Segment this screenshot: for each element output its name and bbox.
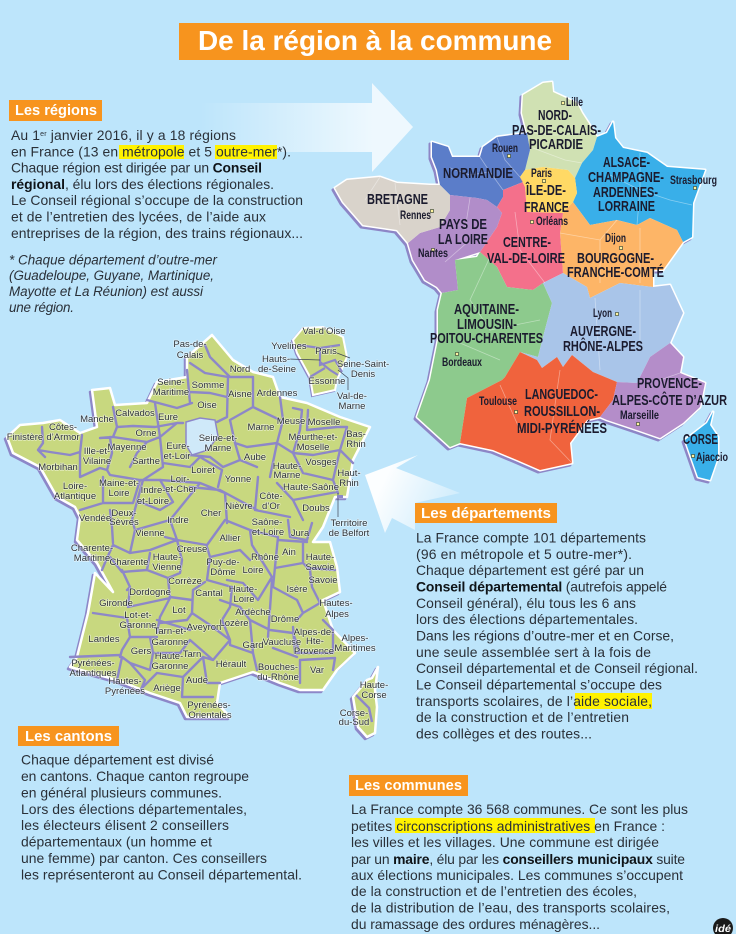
text: communes: de la distribution de l’eau, des transports scolaires,: [351, 900, 670, 916]
departement names: Cantal: [195, 588, 223, 599]
departement names: Dordogne: [129, 587, 171, 598]
departement names: [7, 326, 389, 728]
mainland shape: [7, 335, 370, 717]
arrow: departements to map: [365, 455, 460, 533]
departement names: Yvelines: [271, 341, 307, 352]
city names: [400, 97, 728, 464]
departement names: Loire: [108, 488, 130, 499]
text: regions: Le Conseil régional s’occupe de la construction: [11, 192, 303, 208]
text: communes: de la construction et de l’entretien des écoles,: [351, 883, 637, 899]
region names: LANGUEDOC-: [525, 386, 598, 403]
region names: PAS-DE-CALAIS-: [512, 122, 601, 139]
departement borders: [38, 345, 353, 697]
region names: CENTRE-: [503, 234, 551, 251]
text: cantons: les électeurs élisent 2 conseillers: [21, 817, 229, 833]
region names: LA LOIRE: [438, 231, 488, 248]
departement names: Indre-: [141, 485, 165, 496]
region names: AUVERGNE-: [570, 323, 636, 340]
departement names: Gers: [131, 646, 152, 657]
departement borders inside regions: [365, 132, 692, 463]
departement names: Atlantiques: [69, 668, 117, 679]
text: footnote: une région.: [9, 300, 74, 315]
departement names: Garonne: [152, 637, 188, 648]
text: cantons: une femme) par canton. Ces conseillers: [21, 850, 267, 866]
departement names: Vosges: [305, 457, 337, 468]
region names: ARDENNES-: [593, 184, 658, 201]
departement names: Marne: [248, 422, 274, 433]
region names: ÎLE-DE-: [525, 181, 566, 199]
departement names: Bas-: [346, 429, 366, 440]
departement names: Denis: [351, 369, 375, 380]
departement names: Allier: [219, 533, 241, 544]
text: cantons: en cantons. Chaque canton regroupe: [21, 768, 249, 784]
region names: ALSACE-: [603, 154, 650, 171]
departement names: et-Cher: [165, 484, 197, 495]
city names: Bordeaux: [442, 357, 482, 369]
departement names: Rhône: [251, 552, 279, 563]
heading: Les communes: Les communes: [355, 777, 462, 794]
text: cantons: Lors des élections départementales,: [21, 801, 247, 817]
departement names: Seine-Saint-: [337, 359, 389, 370]
text: departements: Chaque département est géré par un: [416, 562, 644, 578]
Ile-de-France gap: [186, 418, 218, 455]
city names: Dijon: [605, 233, 626, 245]
departement names: d’Armor: [46, 432, 80, 443]
departement names: Indre: [167, 515, 189, 526]
text: cantons: départementaux (un homme et: [21, 834, 212, 850]
departement names: Manche: [80, 414, 114, 425]
text: departements: La France compte 101 départements: [416, 530, 646, 546]
departement names: Yonne: [225, 474, 251, 485]
map: departements of France: [7, 326, 389, 737]
departement names: Haute-: [155, 651, 183, 662]
departement names: Hauts-: [262, 354, 290, 365]
city names: Ajaccio: [696, 452, 728, 464]
departement names: d’Or: [262, 501, 280, 512]
departement names: Eure: [158, 412, 178, 423]
region names: VAL-DE-LOIRE: [487, 250, 565, 267]
departement names: Nord: [230, 364, 250, 375]
text: departements: (96 en métropole et 5 outre-mer*).: [416, 546, 632, 562]
departement names: Deux-: [111, 508, 137, 519]
text: communes: les villes et les villages. Une commune est dirigée: [351, 834, 659, 850]
departement names: Tarn: [183, 649, 201, 660]
departement names: Sèvres: [109, 517, 139, 528]
departement names: Ariège: [153, 683, 181, 694]
departement names: Charente: [109, 557, 149, 568]
departement names: Haute-: [229, 584, 257, 595]
text: communes: La France compte 36 568 communes. Ce sont les plus: [351, 801, 688, 817]
region names: FRANCE: [524, 199, 569, 216]
departement names: Côtes-: [49, 422, 77, 433]
departement names: Ardennes: [257, 388, 298, 399]
heading: Les regions: Les régions: [15, 102, 97, 119]
departement names: Lot: [172, 605, 186, 616]
departement names: Ille-et-: [84, 446, 110, 457]
departement names: Creuse: [177, 544, 207, 555]
departement names: Pyrénées-: [187, 700, 231, 711]
departement names: Loire: [242, 565, 264, 576]
city names: Orléans: [536, 216, 568, 228]
departement names: Ain: [282, 547, 296, 558]
departement names: Oise: [197, 400, 217, 411]
departement names: du-Rhône: [257, 672, 299, 683]
departement names: du-Sud: [339, 717, 369, 728]
region names: BRETAGNE: [367, 191, 428, 208]
departement names: Orientales: [188, 710, 232, 721]
departement names: Provence: [294, 646, 334, 657]
city names: Lyon: [593, 308, 612, 320]
text: cantons: les représenteront au Conseil départemental.: [21, 866, 302, 882]
Corse departements: [353, 667, 378, 737]
departement names: Hérault: [216, 659, 247, 670]
logo: ide: [713, 918, 733, 934]
departement names: Loir-: [170, 474, 190, 485]
departement names: Vienne: [135, 528, 165, 539]
departement names: Corse: [361, 690, 387, 701]
departement names: Haute-: [306, 552, 334, 563]
departement names: Val-d’Oise: [302, 326, 346, 337]
text: footnote: [9, 252, 218, 315]
departement names: Loire: [233, 594, 255, 605]
departement names: Loiret: [191, 465, 215, 476]
region names: ROUSSILLON-: [524, 403, 600, 420]
departement names: Aude: [186, 675, 208, 686]
departement names: Seine-et-: [199, 433, 237, 444]
departement names: Gironde: [99, 598, 133, 609]
departement names: Lozère: [219, 618, 249, 629]
text: regions: entreprises de la région, des trains régionaux...: [11, 225, 303, 241]
region names: LIMOUSIN-: [457, 316, 517, 333]
inset: Paris region: [288, 327, 350, 517]
departement names: Meurthe-et-: [288, 432, 338, 443]
departement names: Eure-: [166, 441, 190, 452]
region names: POITOU-CHARENTES: [430, 330, 543, 347]
text: footnote: * Chaque département d’outre-mer: [9, 252, 218, 268]
text: departements: Conseil général), élu tous les 6 ans: [416, 595, 636, 611]
departement names: Maritime: [153, 387, 189, 398]
region names: RHÔNE-ALPES: [563, 337, 643, 355]
region shapes: [335, 82, 718, 480]
text: communes: du ramassage des ordures ménagères...: [351, 916, 600, 932]
departement names: Meuse: [277, 416, 305, 427]
departement names: Vaucluse: [263, 637, 301, 648]
departement names: Morbihan: [38, 462, 78, 473]
city names: Nantes: [418, 248, 448, 260]
departement names: Mayenne: [107, 442, 147, 453]
departement names: Garonne: [152, 661, 188, 672]
departement names: Maritimes: [334, 643, 376, 654]
departement names: Doubs: [302, 503, 330, 514]
departement names: Atlantique: [54, 491, 96, 502]
text: communes: aux élections municipales. Les communes s’occupent: [351, 867, 683, 883]
text: departements: une seule assemblée sert à la fois de: [416, 644, 651, 660]
text: regions: [11, 127, 303, 241]
city names: Marseille: [620, 410, 659, 422]
region names: CHAMPAGNE-: [588, 169, 664, 186]
departement names: Maine-et-: [99, 478, 139, 489]
departement names: Hautes-: [319, 598, 353, 609]
departement names: Calais: [177, 350, 203, 361]
map: regions of France: [335, 82, 728, 480]
text: regions: janvier 2016, il y a 18 régions: [47, 127, 236, 143]
departement names: Aube: [244, 452, 266, 463]
departement names: Haute-: [360, 680, 388, 691]
departement names: Alpes-de-: [294, 627, 334, 638]
departement names: Marne: [274, 470, 300, 481]
departement names: Moselle: [297, 442, 329, 453]
departement names: Isère: [286, 584, 308, 595]
heading: Les departements: Les départements: [421, 505, 551, 522]
departement names: Charente-: [71, 543, 113, 554]
departement names: et-Loire: [137, 496, 169, 507]
departement names: Territoire: [331, 518, 367, 529]
region names: CORSE: [683, 431, 718, 448]
departement names: Tarn-et-: [154, 626, 186, 637]
departement names: Seine-: [157, 377, 185, 388]
departement names: Marne: [205, 443, 231, 454]
region names: AQUITAINE-: [454, 301, 519, 318]
city names: Rouen: [492, 143, 518, 155]
region names: PICARDIE: [529, 136, 583, 153]
departement names: Somme: [192, 380, 224, 391]
departement names: Val-de-: [337, 391, 367, 402]
text: communes: [351, 801, 688, 932]
departement names: Pas-de-: [173, 339, 207, 350]
region names: PAYS DE: [439, 216, 487, 233]
departement names: Essonne: [309, 376, 345, 387]
departement names: Marne: [339, 401, 365, 412]
departement names: Côte-: [259, 491, 283, 502]
departement names: Aveyron: [187, 622, 221, 633]
text: departements: transports scolaires, de l’aide sociale,: [416, 693, 652, 709]
departement names: Jura: [291, 528, 310, 539]
departement names: de-Seine: [258, 364, 296, 375]
departement names: Bouches-: [258, 662, 298, 673]
text: departements: lors des élections départementales.: [416, 611, 638, 627]
departement names: Savoie: [305, 562, 335, 573]
departement names: Aisne: [228, 389, 252, 400]
departement names: Paris: [315, 346, 337, 357]
region names: MIDI-PYRÉNÉES: [517, 420, 607, 437]
text: cantons: en général plusieurs communes.: [21, 784, 222, 800]
departement names: Hautes-: [108, 676, 142, 687]
departement names: et-Loir: [164, 451, 190, 462]
departement names: Vienne: [152, 562, 182, 573]
departement names: Var: [310, 665, 324, 676]
city names: Paris: [531, 168, 552, 180]
departement names: Rhin: [339, 478, 359, 489]
departement names: Cher: [201, 508, 221, 519]
departement names: Saône-: [252, 517, 282, 528]
departement names: Orne: [135, 428, 157, 439]
departement names: Finistère: [7, 432, 43, 443]
departement names: Haute-: [273, 461, 301, 472]
city names: Rennes: [400, 210, 431, 222]
text: regions: régional, élu lors des élections régionales.: [11, 176, 274, 192]
departement names: Maritime: [74, 553, 110, 564]
text: regions: et de l’entretien des lycées, de l’aide aux: [11, 208, 266, 224]
city names: Lille: [566, 97, 583, 109]
departement names: Haute-: [153, 552, 181, 563]
region names: FRANCHE-COMTÉ: [567, 264, 664, 281]
region names: BOURGOGNE-: [577, 250, 654, 267]
departement names: Haute-Saône: [283, 482, 339, 493]
text: regions: Chaque région est dirigée par un Conseil: [11, 160, 262, 176]
departement names: Loire-: [63, 481, 87, 492]
departement names: Pyrénées-: [71, 658, 115, 669]
departement names: Vendée: [79, 513, 111, 524]
text: communes: petites circonscriptions administratives en France :: [351, 818, 665, 834]
text: departements: Conseil départemental et de Conseil régional.: [416, 660, 698, 676]
departement names: Landes: [88, 634, 120, 645]
arrow: regions to map: [200, 83, 413, 172]
departement names: Puy-de-: [206, 557, 240, 568]
departement names: Drôme: [271, 614, 299, 625]
departement names: Alpes-: [342, 633, 368, 644]
departement names: Rhin: [346, 439, 366, 450]
departement names: Savoie: [308, 575, 338, 586]
departement names: Gard: [242, 640, 264, 651]
text: cantons: [21, 752, 302, 882]
departement names: Calvados: [115, 408, 155, 419]
departement names: Corrèze: [168, 576, 202, 587]
text: departements: Dans les régions d’outre-mer et en Corse,: [416, 628, 674, 644]
text: footnote: (Guadeloupe, Guyane, Martinique,: [9, 268, 214, 283]
region names: NORD-: [538, 107, 572, 124]
region names: NORMANDIE: [443, 165, 513, 182]
departement names: Dôme: [210, 567, 236, 578]
departement names: Corse-: [340, 708, 368, 719]
text: departements: Le Conseil départemental s’occupe des: [416, 676, 662, 692]
city names: Toulouse: [479, 396, 517, 408]
departement names: Garonne: [120, 620, 156, 631]
heading: Les cantons: Les cantons: [25, 728, 112, 745]
departement names: Sarthe: [132, 456, 160, 467]
text: departements: [416, 530, 698, 742]
departement names: Alpes: [325, 609, 349, 620]
Belfort marker: [337, 495, 343, 498]
region names: PROVENCE-: [637, 375, 702, 392]
region names: LORRAINE: [598, 198, 655, 215]
departement names: Pyrénées: [105, 686, 145, 697]
text: communes: par un maire, élu par les conseillers municipaux suite: [351, 851, 685, 867]
departement names: Nièvre: [225, 501, 253, 512]
text: departements: des collèges et des routes...: [416, 726, 592, 742]
text: regions: Au 1: [11, 127, 40, 143]
text: footnote: Mayotte et La Réunion) est aussi: [9, 284, 204, 299]
city markers: [430, 102, 696, 458]
text: departements: de la construction et de l’entretien: [416, 709, 629, 725]
departement names: Moselle: [308, 417, 340, 428]
city names: Strasbourg: [670, 175, 717, 187]
title: De la région à la commune: [198, 25, 552, 56]
text: regions: en France (13 en métropole et 5 outre-mer*).: [11, 144, 291, 160]
text: departements: Conseil départemental (autrefois appelé: [416, 578, 667, 594]
departement names: et-Loire: [252, 527, 284, 538]
region names: [367, 107, 727, 448]
text: regions: er: [40, 131, 47, 138]
departement names: Lot-et-: [124, 610, 152, 621]
departement names: Hte-: [306, 636, 324, 647]
departement names: Vilaine: [83, 456, 111, 467]
departement names: Haut-: [337, 468, 361, 479]
text: cantons: Chaque département est divisé: [21, 752, 214, 768]
departement names: Ardèche: [235, 607, 271, 618]
departement names: de Belfort: [329, 528, 370, 539]
